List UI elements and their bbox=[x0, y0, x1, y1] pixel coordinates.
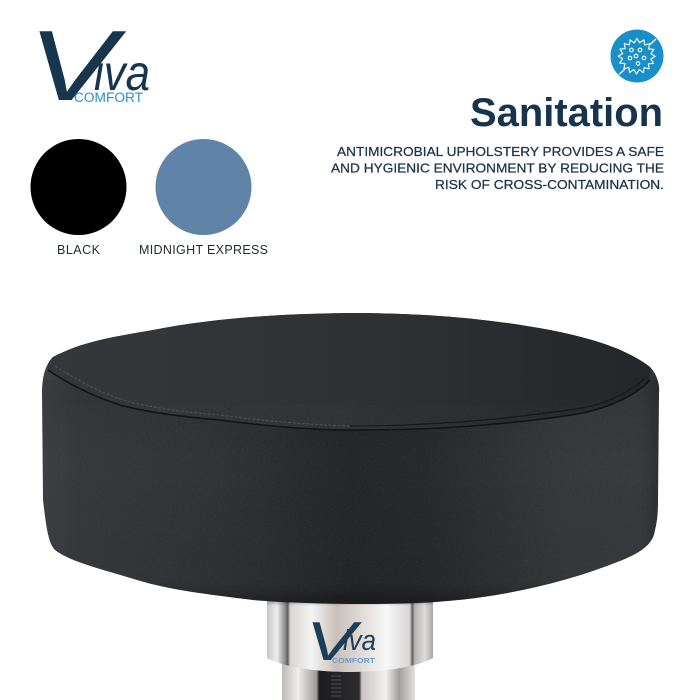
seam stitching bbox=[48, 366, 650, 430]
heading: Sanitation: Sanitation bbox=[470, 91, 663, 135]
color swatch: midnight express bbox=[139, 139, 268, 257]
logo: Viva Comfort: V bbox=[28, 10, 127, 122]
logo: Viva Comfort: iva bbox=[94, 45, 150, 101]
chrome logo: V bbox=[306, 610, 362, 672]
text block: description: RISK OF CROSS-CONTAMINATION. bbox=[435, 178, 664, 192]
logo: Viva Comfort bbox=[28, 10, 150, 122]
text block: description: ANTIMICROBIAL UPHOLSTERY PROVIDES A SAFE bbox=[337, 145, 664, 159]
color swatch: black bbox=[30, 139, 126, 257]
text block: description: AND HYGIENIC ENVIRONMENT BY REDUCING THE bbox=[331, 162, 664, 176]
chrome column bbox=[267, 600, 433, 700]
stool photo bbox=[40, 300, 665, 700]
color swatch: black: BLACK bbox=[57, 243, 101, 257]
chrome logo bbox=[306, 610, 376, 672]
logo: Viva Comfort: COMFORT bbox=[74, 90, 143, 105]
chrome logo: iva bbox=[343, 625, 376, 657]
seat cushion bbox=[40, 300, 665, 610]
icon: crossed-out germ bbox=[610, 30, 664, 82]
color swatch: midnight express: MIDNIGHT EXPRESS bbox=[139, 243, 268, 257]
text block: description bbox=[331, 145, 664, 192]
chrome logo: COMFORT bbox=[332, 656, 375, 665]
